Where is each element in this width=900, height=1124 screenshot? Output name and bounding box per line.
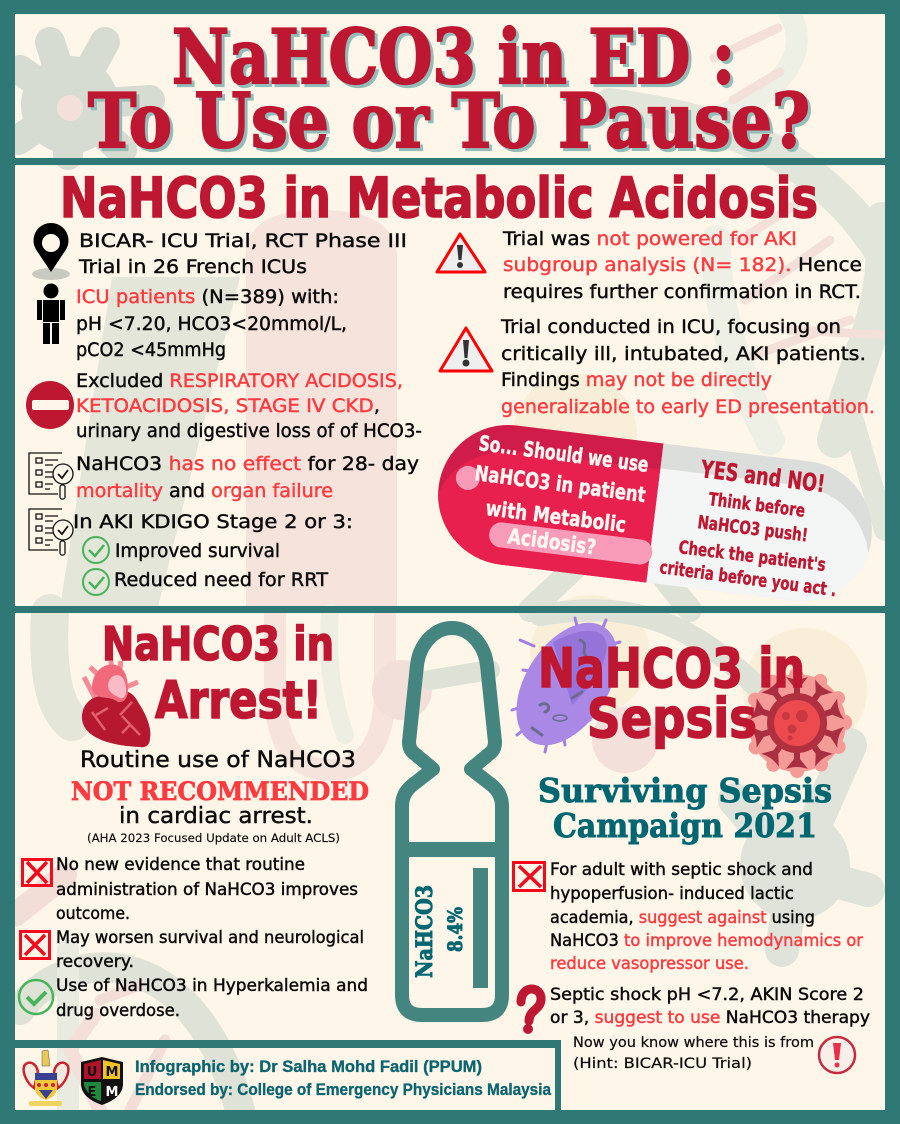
text: trial description: [78, 230, 407, 278]
icon: no entry: [26, 381, 74, 429]
ampoule outline: [402, 628, 502, 1015]
pill question text: NaHCO3 in patient: [473, 461, 647, 507]
text: arrest recommendation: [71, 748, 369, 845]
logo: UMEM shield: [81, 1057, 123, 1105]
logo: UMEM shield: M: [106, 1065, 118, 1080]
text: trial description: Trial in 26 French ICUs: [78, 256, 307, 278]
pill answer text: YES and NO!: [699, 455, 827, 498]
icon: exclamation: [819, 1037, 855, 1073]
heading: surviving sepsis campaign: Surviving Sepsis: [538, 771, 832, 810]
icon: heart: [82, 661, 150, 747]
background virus lower right: [735, 745, 868, 950]
text: patients: [76, 286, 347, 361]
icon: warning two: [440, 328, 492, 371]
text: no new evidence: [56, 855, 358, 923]
icon: checklist two: [29, 509, 73, 555]
icon: person: [37, 284, 65, 344]
text: limitation two: [500, 316, 875, 418]
panel: sepsis recommendations: [514, 860, 870, 1073]
text: limitation two: generalizable to early ED presentation.: [501, 396, 875, 418]
text: suggest against: For adult with septic shock and: [550, 860, 813, 879]
title: NaHCO3 in ED :: [172, 13, 735, 101]
text: AKI subgroup: In AKI KDIGO Stage 2 or 3:: [73, 511, 353, 533]
ampoule label bar: [473, 868, 488, 988]
text: suggest against: NaHCO3 to improve hemodynamics or: [550, 931, 863, 950]
text: suggest against: hypoperfusion- induced lactic: [550, 884, 794, 903]
text: hint: [573, 1035, 814, 1072]
text: may worsen: [56, 928, 364, 971]
text: hyperkalemia: Use of NaHCO3 in Hyperkalemia and: [56, 976, 368, 995]
pill question text: [473, 431, 650, 560]
text: trial description: BICAR- ICU Trial, RCT Phase III: [79, 230, 407, 252]
title: To Use or To Pause?: [88, 77, 810, 165]
text: hyperkalemia: drug overdose.: [56, 1001, 180, 1020]
text: exclusions: Excluded RESPIRATORY ACIDOSIS,: [76, 370, 403, 392]
text: no new evidence: No new evidence that routine: [56, 855, 305, 874]
pill answer text: Check the patient's: [677, 537, 827, 576]
text: arrest recommendation: NOT RECOMMENDED: [71, 777, 369, 806]
text: limitation one: subgroup analysis (N= 182). Hence: [503, 254, 862, 276]
panel: metabolic acidosis trial details: [26, 223, 422, 595]
text: may worsen: recovery.: [56, 952, 134, 971]
text: hint: (Hint: BICAR-ICU Trial): [573, 1056, 752, 1072]
heading: sepsis: Sepsis: [587, 687, 757, 750]
text: arrest recommendation: (AHA 2023 Focused Update on Adult ACLS): [87, 831, 340, 845]
text: hint: Now you know where this is from: [573, 1035, 814, 1051]
text: limitation two: Trial conducted in ICU, focusing on: [500, 316, 841, 338]
pill question text: Acidosis?: [506, 524, 598, 560]
icon: cross one: [22, 860, 52, 886]
credits text: [135, 1057, 551, 1099]
logo: UMEM shield: E: [88, 1085, 96, 1100]
icon: check improved survival: [83, 537, 109, 563]
ampoule label: NaHCO3: [412, 885, 438, 978]
ampoule illustration: [402, 628, 502, 1015]
logo: UMEM shield: U: [87, 1065, 97, 1080]
icon: warning one: [437, 234, 485, 272]
text: no effect: [76, 453, 419, 502]
text: limitation one: [502, 228, 862, 303]
pill body: [430, 417, 880, 609]
footer frame: [0, 1040, 561, 1110]
logo: UMEM shield: M: [106, 1085, 118, 1100]
ampoule label: [412, 885, 467, 978]
footer credits: [0, 1040, 561, 1110]
text: may worsen: May worsen survival and neurological: [56, 928, 364, 947]
text: no new evidence: administration of NaHCO3 improves: [56, 880, 358, 899]
pill answer text: [658, 455, 838, 601]
text: limitation two: critically ill, intubated, AKI patients.: [501, 343, 866, 365]
icon: cross: [514, 862, 544, 890]
text: patients: pCO2 <45mmHg: [76, 339, 226, 361]
heading: arrest: [102, 617, 334, 731]
text: suggest to use: [550, 985, 870, 1027]
text: limitation one: Trial was not powered for AKI: [502, 228, 797, 250]
text: patients: pH <7.20, HCO3<20mmol/L,: [76, 313, 347, 335]
icon: location pin: [32, 223, 70, 280]
pill question text: So... Should we use: [477, 431, 650, 477]
pill callout: [430, 417, 880, 609]
text: no effect: NaHCO3 has no effect for 28- day: [76, 453, 419, 475]
text: suggest against: reduce vasopressor use.: [550, 954, 749, 973]
text: reduced RRT: Reduced need for RRT: [114, 569, 328, 591]
credits text: Endorsed by: College of Emergency Physicians Malaysia: [135, 1080, 551, 1099]
pill answer text: criteria before you act .: [658, 557, 838, 601]
heading: surviving sepsis campaign: Campaign 2021: [553, 806, 817, 845]
text: patients: ICU patients (N=389) with:: [76, 286, 339, 308]
heading: surviving sepsis campaign: [538, 771, 832, 845]
text: exclusions: urinary and digestive loss of of HCO3-: [76, 420, 422, 442]
pill answer text: NaHCO3 push!: [696, 512, 809, 546]
heading: arrest: Arrest!: [155, 671, 322, 731]
text: suggest to use: Septic shock pH <7.2, AKIN Score 2: [550, 985, 864, 1004]
ampoule label: 8.4%: [443, 907, 467, 952]
icon: check: [19, 980, 53, 1014]
icon: question mark: [521, 989, 541, 1034]
icon: check reduced RRT: [83, 569, 109, 595]
text: arrest recommendation: Routine use of NaHCO3: [80, 748, 356, 773]
text: arrest recommendation: in cardiac arrest.: [119, 804, 313, 829]
pill question text: with Metabolic: [484, 496, 627, 537]
text: suggest to use: or 3, suggest to use NaHCO3 therapy: [550, 1008, 870, 1027]
text: suggest against: [550, 860, 863, 973]
panel: trial limitations: [437, 228, 875, 418]
text: limitation two: Findings may not be directly: [501, 369, 772, 391]
text: exclusions: [76, 370, 422, 442]
text: limitation one: requires further confirmation in RCT.: [503, 281, 861, 303]
icon: bacterium: [496, 605, 638, 763]
text: exclusions: KETOACIDOSIS, STAGE IV CKD ,: [76, 395, 380, 417]
text: no new evidence: outcome.: [56, 904, 130, 923]
icon: checklist one: [29, 453, 73, 499]
heading: sepsis: NaHCO3 in: [538, 637, 805, 700]
icon: cross two: [20, 932, 50, 958]
icon: virus: [748, 674, 846, 772]
pill answer text: Think before: [707, 489, 806, 522]
text: suggest against: academia, suggest against using: [550, 908, 815, 927]
heading: sepsis: [538, 637, 805, 750]
logo: college crest: [24, 1050, 68, 1106]
credits text: Infographic by: Dr Salha Mohd Fadil (PPUM): [135, 1057, 482, 1076]
text: no effect: mortality and organ failure: [76, 480, 333, 502]
heading: arrest: NaHCO3 in: [102, 617, 334, 671]
title: [88, 13, 810, 165]
panel: arrest bullet list: [19, 855, 368, 1020]
background virus top left: [18, 42, 150, 155]
text: improved survival: Improved survival: [115, 540, 280, 562]
text: hyperkalemia: [56, 976, 368, 1020]
